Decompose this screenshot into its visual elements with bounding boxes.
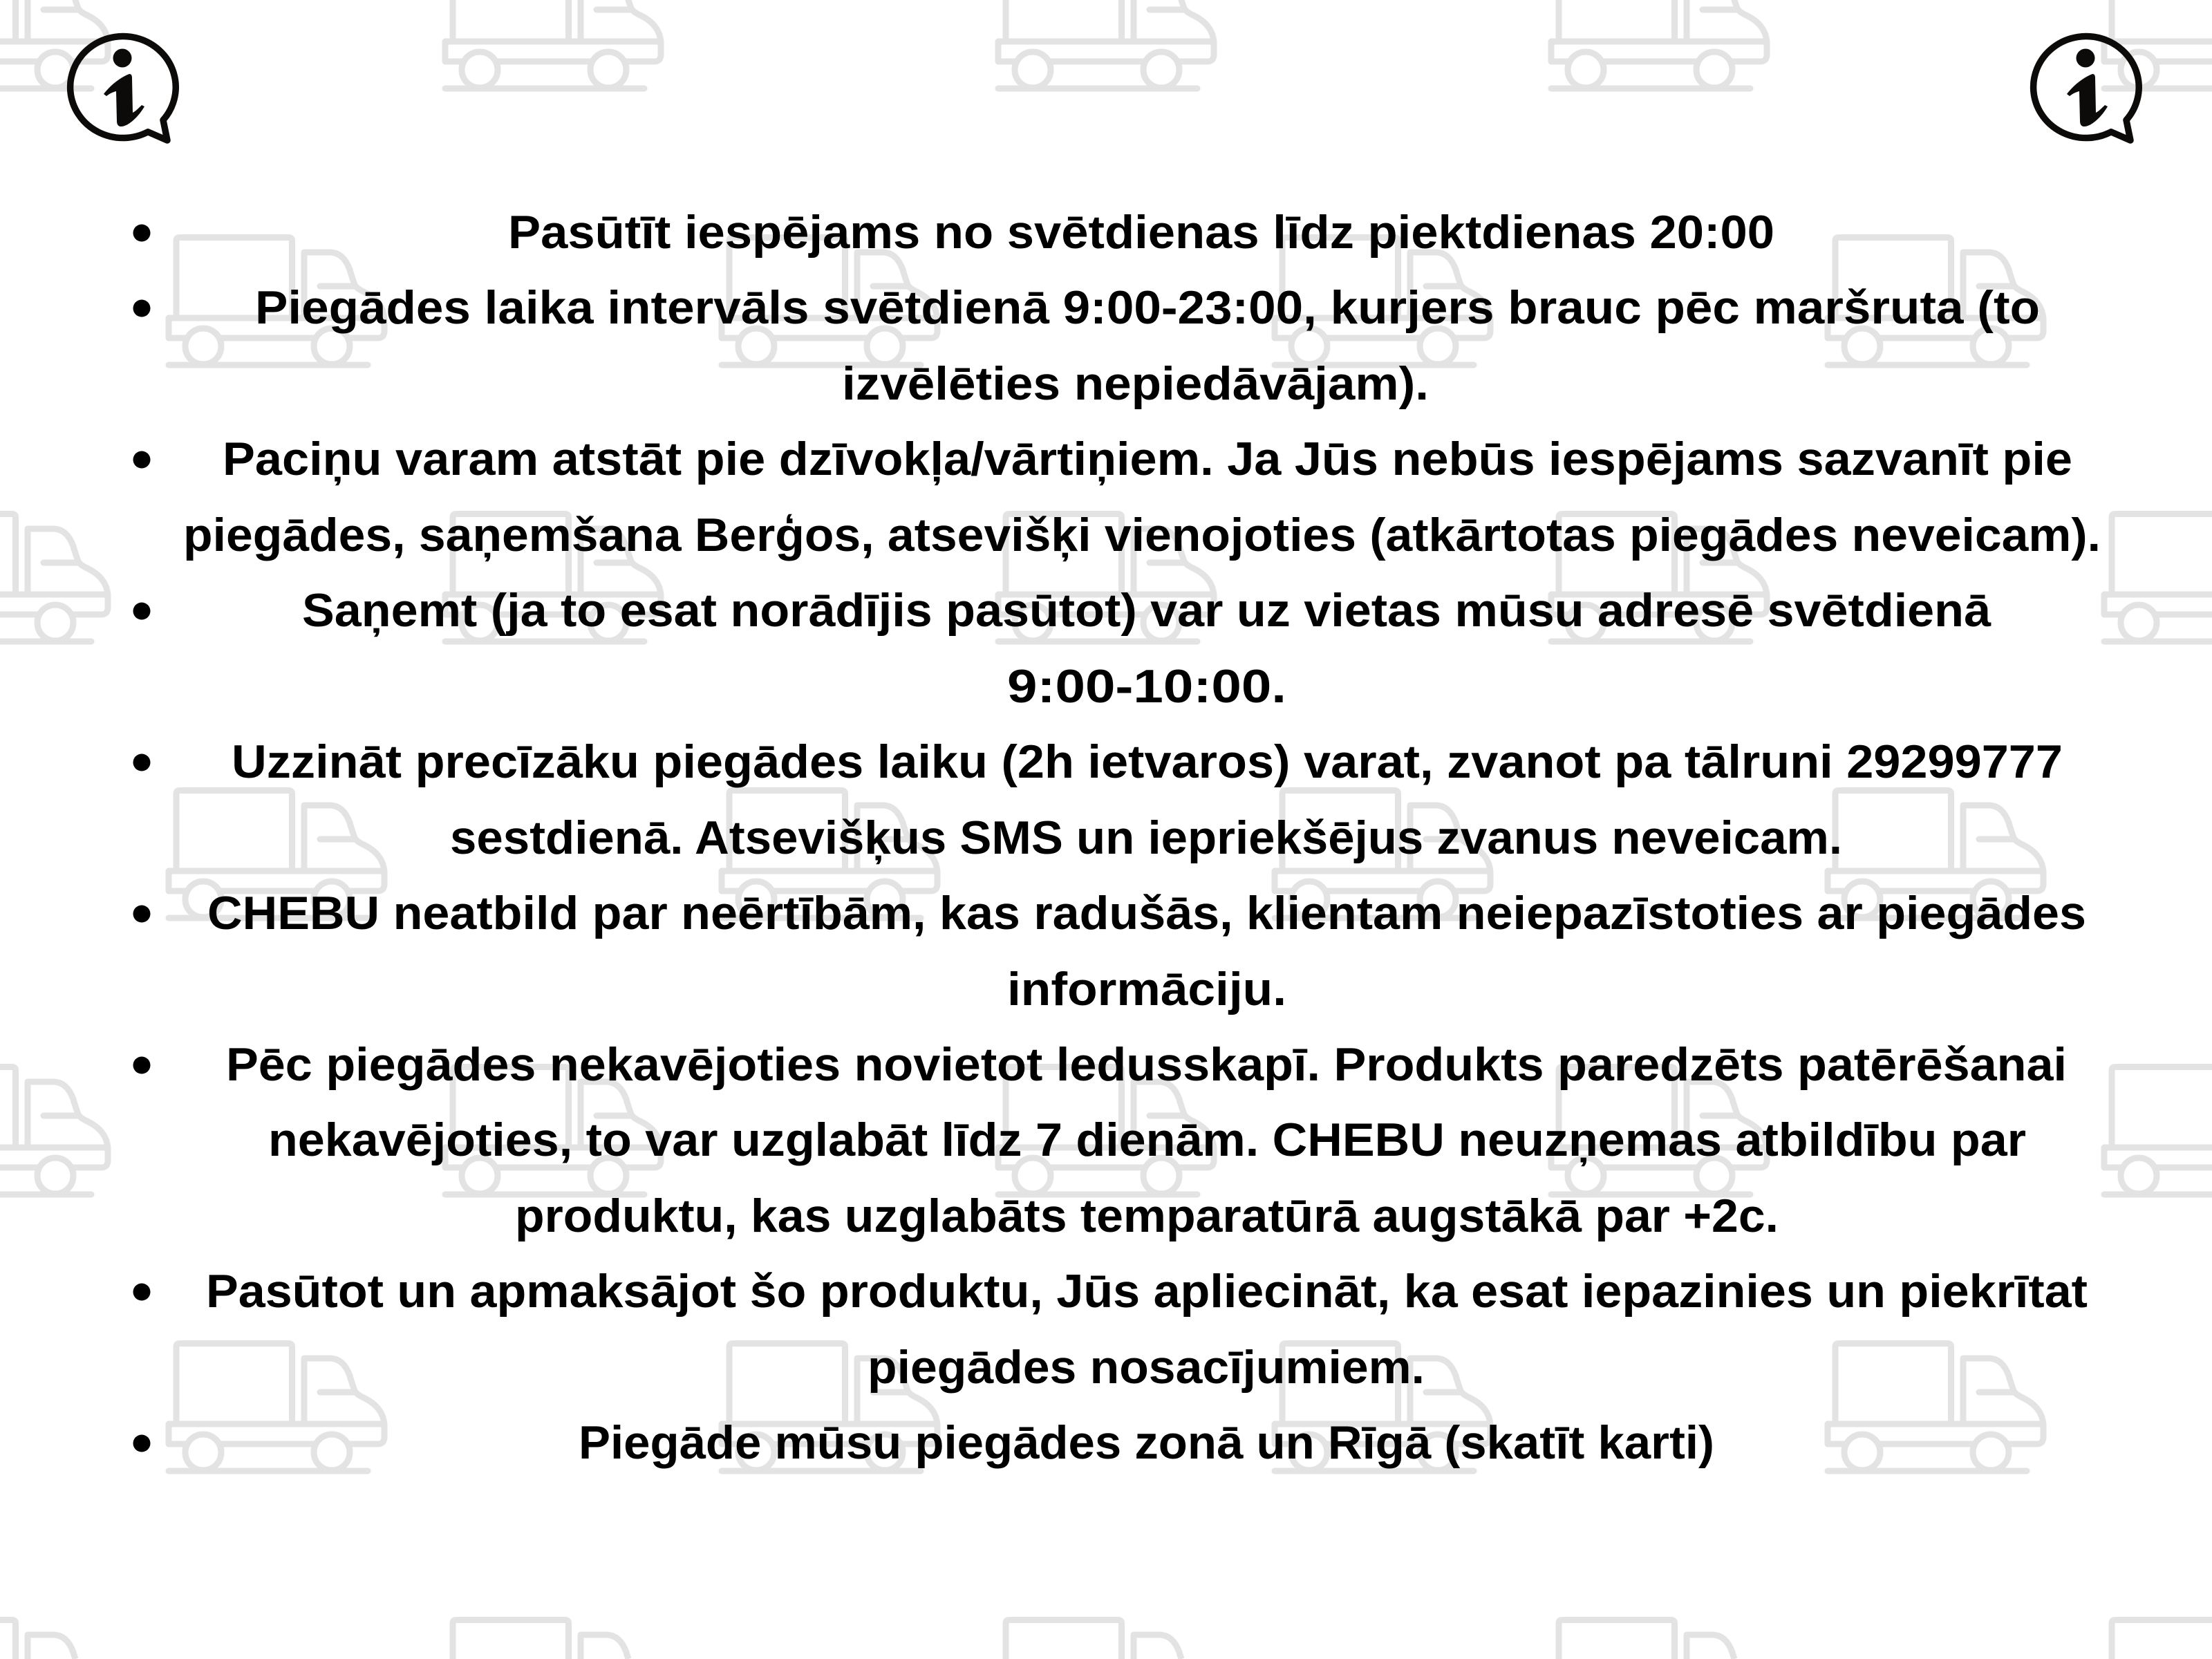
list item 3: leaving the parcel: piegādes, saņemšana Berģos, atsevišķi vienojoties (atkārtotas piegādes neveicam). xyxy=(183,509,2101,562)
list item 4: pickup xyxy=(133,584,1991,713)
list item 3: leaving the parcel xyxy=(133,433,2101,562)
list item 8: acceptance of terms xyxy=(133,1265,2088,1394)
list item 6: liability: CHEBU neatbild par neērtībām, kas radušās, klientam neiepazīstoties ar piegādes xyxy=(207,887,2086,939)
list item 7: storage: produktu, kas uzglabāts temparatūrā augstākā par +2c. xyxy=(515,1190,1779,1242)
list item 8: acceptance of terms: Pasūtot un apmaksājot šo produktu, Jūs apliecināt, ka esat iepazinies un piekrītat xyxy=(206,1265,2088,1318)
list item 6: liability: informāciju. xyxy=(1007,963,1286,1015)
icon: info speech bubble left xyxy=(71,37,176,140)
list item 9: delivery zone: Piegāde mūsu piegādes zonā un Rīgā (skatīt karti) xyxy=(579,1416,1714,1469)
delivery information list xyxy=(133,206,2101,1469)
list item 4: pickup: 9:00-10:00. xyxy=(1007,660,1286,713)
list item 3: leaving the parcel: Paciņu varam atstāt pie dzīvokļa/vārtiņiem. Ja Jūs nebūs iespējams sazvanīt pie xyxy=(223,433,2072,486)
list item 7: storage: Pēc piegādes nekavējoties novietot ledusskapī. Produkts paredzēts patērēšanai xyxy=(226,1038,2067,1091)
list item 5: exact delivery time: Uzzināt precīzāku piegādes laiku (2h ietvaros) varat, zvanot pa tālruni 29299777 xyxy=(232,735,2063,788)
list item 7: storage: nekavējoties, to var uzglabāt līdz 7 dienām. CHEBU neuzņemas atbildību par xyxy=(268,1114,2026,1167)
list item 7: storage xyxy=(133,1038,2067,1242)
list item 5: exact delivery time xyxy=(133,735,2063,865)
list item 2: delivery time interval: izvēlēties nepiedāvājam). xyxy=(842,357,1429,410)
list item 8: acceptance of terms: piegādes nosacījumiem. xyxy=(868,1341,1425,1394)
icon: info speech bubble right xyxy=(2034,37,2139,140)
list item 5: exact delivery time: sestdienā. Atsevišķus SMS un iepriekšējus zvanus neveicam. xyxy=(450,812,1842,865)
list item 1: ordering window: Pasūtīt iespējams no svētdienas līdz piektdienas 20:00 xyxy=(508,206,1774,259)
list item 4: pickup: Saņemt (ja to esat norādījis pasūtot) var uz vietas mūsu adresē svētdienā xyxy=(302,584,1991,637)
list item 2: delivery time interval: Piegādes laika intervāls svētdienā 9:00-23:00, kurjers brauc pēc maršruta (to xyxy=(255,281,2040,334)
list item 2: delivery time interval xyxy=(133,281,2040,410)
list item 6: liability xyxy=(133,887,2086,1015)
